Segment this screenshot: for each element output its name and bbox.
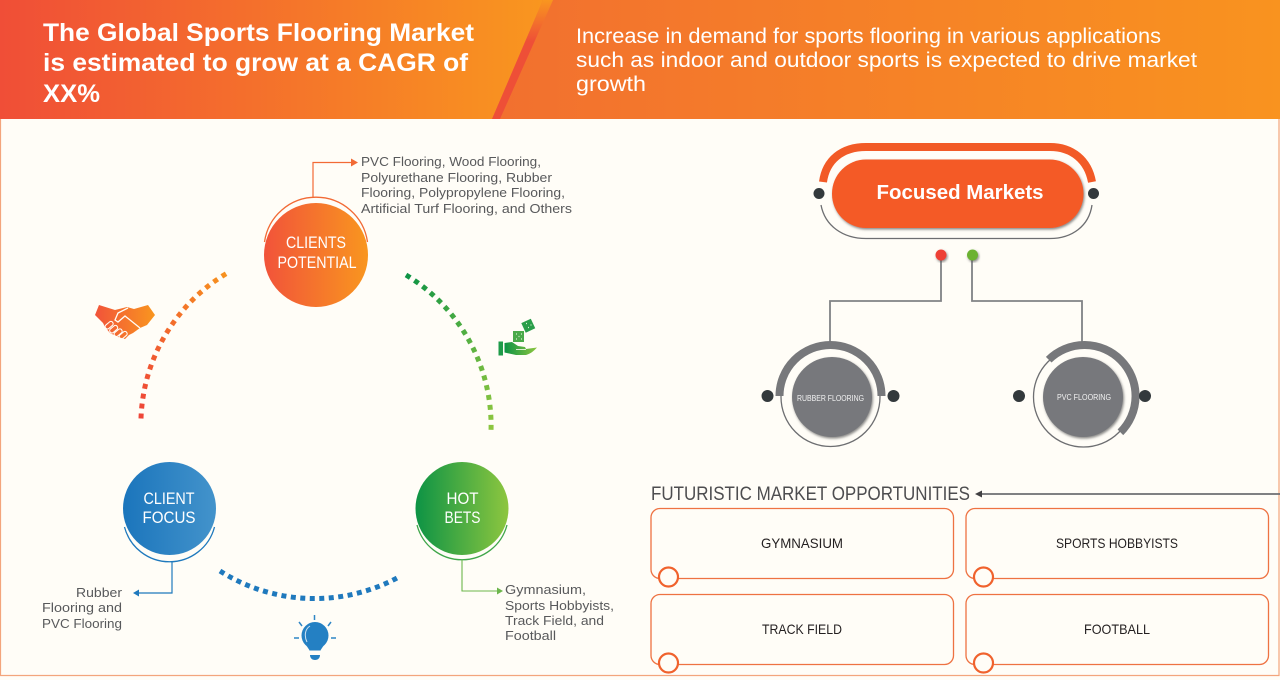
arrow (975, 490, 1280, 498)
section heading: FUTURISTIC MARKET OPPORTUNITIES (651, 483, 970, 505)
card: sports hobbyists: SPORTS HOBBYISTS (1056, 535, 1178, 551)
header banner (0, 0, 1280, 119)
icon: light bulb (294, 615, 336, 660)
panel: focused markets (814, 147, 1099, 238)
icon: handshake (95, 305, 155, 340)
card: track field (651, 594, 954, 672)
focus list: Flooring and (42, 600, 122, 615)
panel: client focus: FOCUS (142, 509, 196, 527)
panel: client focus (42, 462, 216, 631)
card: football (966, 594, 1268, 672)
product list: Polyurethane Flooring, Rubber (361, 170, 553, 185)
panel: clients potential (264, 154, 573, 307)
heading: XX% (43, 80, 100, 108)
focus list (42, 585, 123, 631)
node: pvc flooring (1013, 345, 1151, 447)
card: gymnasium: GYMNASIUM (761, 535, 843, 551)
dotted arc: blue (220, 571, 397, 599)
panel: hot bets: BETS (444, 509, 480, 527)
card: football: FOOTBALL (1084, 621, 1150, 637)
node: pvc flooring: PVC FLOORING (1057, 392, 1111, 402)
card: track field: TRACK FIELD (762, 621, 842, 637)
header description: Increase in demand for sports flooring in various applications (576, 25, 1161, 48)
connector: green dot to pvc flooring (967, 250, 1082, 343)
product list: Flooring, Polypropylene Flooring, (361, 185, 565, 200)
panel: futuristic market opportunities (651, 483, 1280, 672)
connector arrow (462, 560, 503, 594)
focus list: PVC Flooring (42, 616, 122, 631)
connector: red dot to rubber flooring (830, 250, 946, 343)
panel: hot bets: HOT (446, 490, 478, 508)
card: sports hobbyists (966, 508, 1268, 586)
opportunities list: Gymnasium, (505, 582, 586, 597)
product list (361, 154, 573, 216)
header description (576, 25, 1197, 96)
connector arrow (133, 562, 172, 596)
node: rubber flooring (762, 345, 900, 446)
connector arrow (313, 158, 358, 198)
icon: dice in hand (498, 319, 537, 356)
node: rubber flooring: RUBBER FLOORING (797, 393, 864, 403)
focused markets pill (832, 160, 1084, 228)
heading: is estimated to grow at a CAGR of (43, 49, 469, 77)
opportunities list: Football (505, 628, 556, 643)
heading: The Global Sports Flooring Market (43, 19, 475, 47)
opportunities list (505, 582, 614, 643)
header description: such as indoor and outdoor sports is expected to drive market (576, 49, 1197, 72)
panel: clients potential: POTENTIAL (278, 254, 356, 272)
dotted arc: orange (141, 272, 229, 418)
panel: clients potential: CLIENTS (286, 234, 346, 252)
panel: client focus: CLIENT (144, 490, 194, 508)
opportunities list: Sports Hobbyists, (505, 598, 614, 613)
heading (43, 19, 475, 108)
product list: Artificial Turf Flooring, and Others (361, 201, 573, 216)
opportunities list: Track Field, and (505, 613, 604, 628)
dotted arc: green (406, 275, 491, 432)
product list: PVC Flooring, Wood Flooring, (361, 154, 541, 169)
card: gymnasium (651, 508, 954, 586)
focus list: Rubber (76, 585, 123, 600)
focused markets pill: Focused Markets (876, 182, 1044, 204)
panel: hot bets (416, 462, 614, 643)
header description: growth (576, 73, 646, 96)
